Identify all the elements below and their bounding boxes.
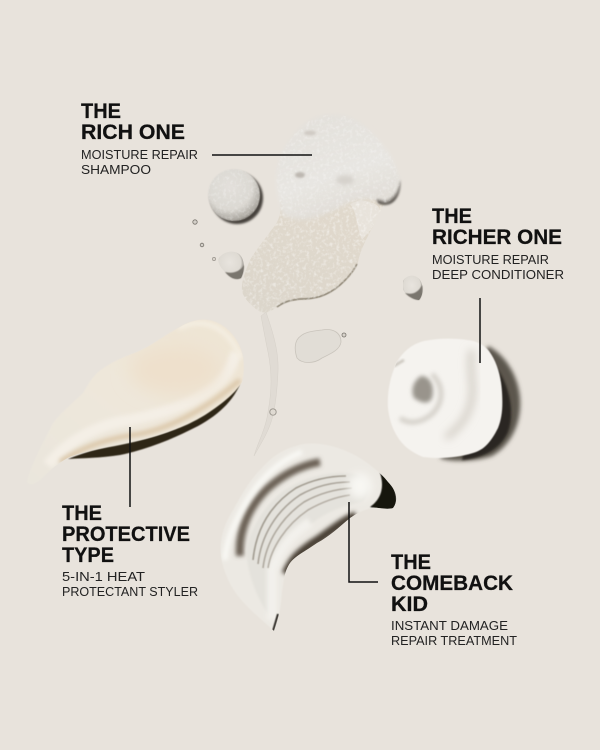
swatch: deep conditioner	[388, 339, 520, 461]
label: the rich one: RICH ONE	[81, 121, 185, 144]
droplets	[193, 220, 423, 415]
label: the protective type	[62, 502, 198, 599]
label: the richer one	[432, 205, 564, 282]
label: the comeback kid: KID	[391, 593, 428, 616]
leader line: the comeback kid	[349, 502, 378, 582]
label: the richer one: THE	[432, 205, 472, 228]
label: the richer one: MOISTURE REPAIR	[432, 252, 549, 267]
label: the protective type: 5-IN-1 HEAT	[62, 569, 145, 584]
label: the rich one: SHAMPOO	[81, 162, 151, 177]
label: the protective type: PROTECTIVE	[62, 523, 190, 546]
label: the comeback kid	[391, 551, 517, 648]
label: the protective type: THE	[62, 502, 102, 525]
swatch: shampoo foam and gel	[240, 112, 402, 456]
leader line: the protective type	[129, 427, 131, 507]
swatch: instant damage repair treatment	[221, 444, 396, 631]
label: the protective type: TYPE	[62, 544, 114, 567]
label: the rich one: MOISTURE REPAIR	[81, 147, 198, 162]
label: the rich one: THE	[81, 100, 121, 123]
swatch: foam ball	[208, 169, 263, 224]
label: the richer one: RICHER ONE	[432, 226, 562, 249]
label: the richer one: DEEP CONDITIONER	[432, 267, 564, 282]
label: the comeback kid: REPAIR TREATMENT	[391, 633, 517, 648]
label: the comeback kid: THE	[391, 551, 431, 574]
label: the comeback kid: INSTANT DAMAGE	[391, 618, 508, 633]
label: the rich one	[81, 100, 198, 177]
leader line: the rich one	[212, 154, 312, 156]
label: the comeback kid: COMEBACK	[391, 572, 513, 595]
swatch: heat protectant cream	[46, 320, 242, 466]
leader line: the richer one	[479, 298, 481, 363]
label: the protective type: PROTECTANT STYLER	[62, 584, 198, 599]
